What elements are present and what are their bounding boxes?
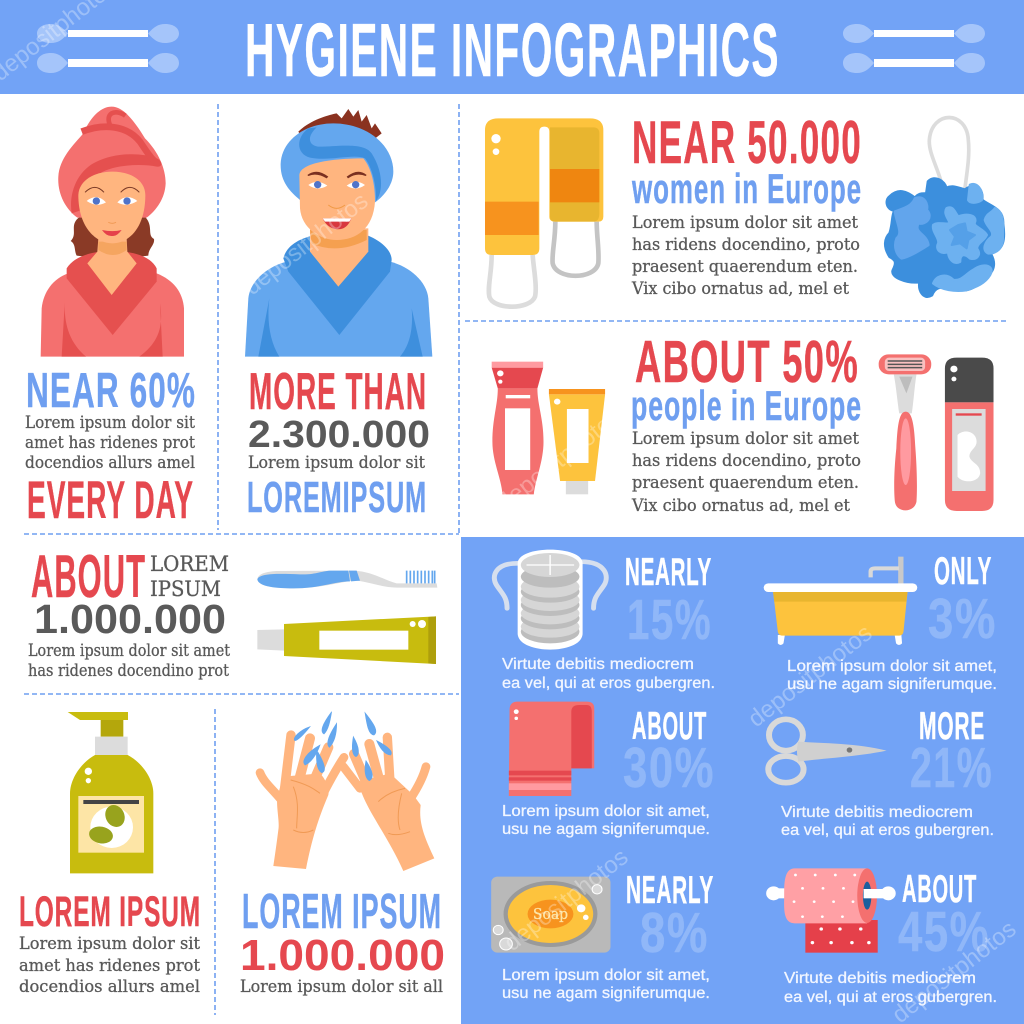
description: usu ne agam signiferumque. [502, 985, 710, 1002]
text block: Lorem ipsum dolor sit amet [632, 213, 858, 232]
panel: man more than 2.300.000 [245, 109, 432, 522]
stat: scissors 21% [768, 705, 994, 839]
stat: cotton pads 15% [494, 550, 715, 692]
description: Lorem ipsum dolor sit amet, [787, 658, 997, 675]
icon: washing hands with drops [260, 712, 434, 871]
text block: Lorem ipsum dolor sit amet [28, 641, 230, 660]
description [502, 803, 710, 838]
header banner [0, 0, 1024, 94]
stat: toilet paper 45% [766, 868, 997, 1006]
side label: IPSUM [150, 577, 221, 601]
description: Virtute debitis mediocrem [502, 656, 694, 673]
description [784, 970, 997, 1006]
icon: man in blue towel and robe [245, 109, 432, 357]
icon: shower gel bottle and yellow tube [492, 362, 605, 494]
icon: red towel [509, 702, 594, 796]
text block: Lorem ipsum dolor sit all [240, 977, 443, 996]
icon: bath strap yellow [485, 118, 603, 307]
text block: amet has ridenes prot [19, 956, 200, 975]
panel: woman near 60% [25, 107, 196, 530]
text block: docendios allurs amel [19, 977, 200, 996]
text block: praesent quaerendum eten. [632, 473, 859, 492]
description: ea vel, qui at eros gubergren. [784, 989, 997, 1006]
icon: bathtub [764, 557, 917, 645]
panel: about 1.000.000 teeth [28, 543, 437, 680]
text block: Lorem ipsum dolor sit amet [632, 429, 859, 448]
description: usu ne agam signiferumque. [502, 821, 710, 838]
description: ea vel, qui at eros gubergren. [781, 822, 994, 839]
heading: LOREM IPSUM [242, 885, 442, 939]
text: depositphotos [499, 843, 633, 957]
icon: blue bath sponge [886, 117, 1004, 296]
icon: scissors [768, 719, 887, 783]
percent: 30% [623, 736, 715, 800]
text block: amet has ridenes prot [25, 433, 195, 452]
text block: has ridens docendino, proto [632, 235, 860, 254]
footer heading: LOREMIPSUM [247, 473, 427, 522]
description [781, 804, 994, 839]
subheading: women in Europe [631, 165, 862, 212]
description: Lorem ipsum dolor sit amet, [502, 967, 710, 984]
icon: soap dish [491, 877, 610, 953]
panel: blue statistics [461, 537, 1024, 1024]
percent: 8% [640, 901, 709, 965]
number: 1.000.000 [240, 931, 445, 980]
icon: soap dish: Soap [533, 905, 568, 923]
text: depositphotos [743, 619, 877, 733]
text block: has ridenes docendino prot [28, 661, 229, 680]
panel: hands lorem ipsum [240, 712, 445, 996]
text: depositphotos [492, 403, 626, 517]
icon: cotton swabs left [37, 24, 179, 73]
heading: ABOUT [31, 543, 146, 610]
panel: soap lorem ipsum [19, 712, 201, 996]
label: NEARLY [626, 869, 714, 912]
description [787, 658, 997, 693]
text block [631, 213, 860, 298]
text block [631, 429, 861, 515]
number: 1.000.000 [34, 596, 226, 642]
icon: olive soap pump bottle [68, 712, 153, 873]
text block: Lorem ipsum dolor sit [248, 453, 425, 472]
description: usu ne agam signiferumque. [787, 676, 997, 693]
icon: razor and shaving foam [879, 354, 994, 511]
icon: woman in pink towel and robe [41, 107, 184, 357]
heading: MORE THAN [249, 363, 427, 421]
percent: 3% [928, 587, 997, 651]
description: ea vel, qui at eros gubergren. [502, 675, 715, 692]
description: Virtute debitis mediocrem [784, 970, 976, 987]
stat: towel 30% [502, 702, 715, 838]
heading: NEAR 60% [26, 364, 196, 418]
heading: NEAR 50.000 [632, 109, 862, 176]
number: 2.300.000 [248, 414, 430, 456]
icon: cotton swabs right [843, 24, 985, 73]
text block: Vix cibo ornatus ad, mel et [631, 496, 850, 515]
text block: has ridens docendino, proto [632, 451, 861, 470]
description [502, 967, 710, 1002]
label: ABOUT [632, 705, 707, 748]
text block: Vix cibo ornatus ad, mel et [631, 279, 849, 298]
side label [150, 552, 229, 601]
percent: 45% [898, 900, 990, 964]
percent: 15% [627, 588, 712, 652]
description: Lorem ipsum dolor sit amet, [502, 803, 710, 820]
text block: Lorem ipsum dolor sit [19, 934, 200, 953]
icon: cotton pads [494, 550, 606, 650]
label: NEARLY [625, 551, 712, 594]
text block [28, 641, 230, 680]
text block: docendios allurs amel [25, 453, 195, 472]
description: Virtute debitis mediocrem [781, 804, 973, 821]
panel: near 50.000 women [485, 109, 1004, 307]
description [502, 656, 715, 692]
footer heading: EVERY DAY [27, 471, 194, 530]
text: depositphotos [239, 187, 373, 301]
icon: toothbrush and toothpaste [257, 571, 437, 664]
heading: ABOUT 50% [635, 329, 859, 395]
stat: bath 3% [764, 550, 997, 693]
text block [25, 413, 195, 472]
text block: praesent quaerendum eten. [632, 257, 858, 276]
text block: Lorem ipsum dolor sit [25, 413, 195, 432]
text block [19, 934, 200, 996]
heading: LOREM IPSUM [19, 888, 201, 936]
stat: soap 8% [491, 869, 714, 1002]
icon: toilet paper roll [766, 868, 896, 953]
panel: about 50% people [492, 329, 994, 515]
side label: LOREM [150, 552, 229, 576]
subheading: people in Europe [631, 382, 862, 429]
